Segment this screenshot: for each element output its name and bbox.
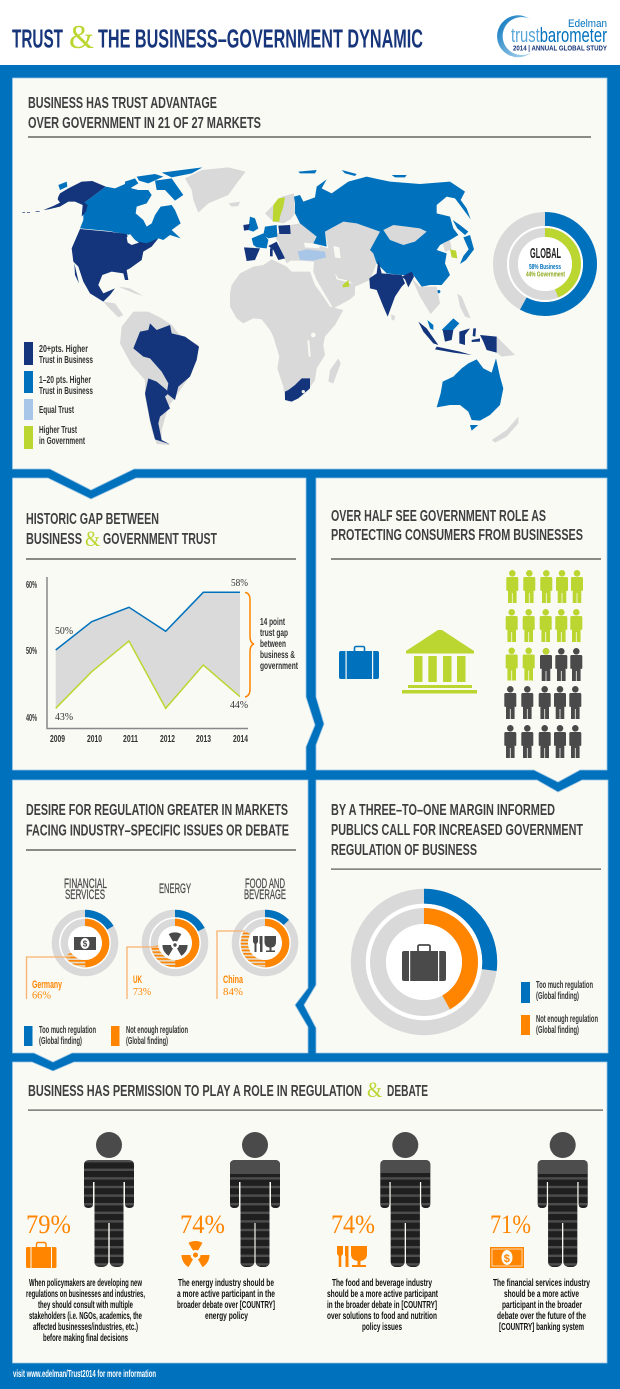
icon: orange fork, knife and glass: [337, 1246, 367, 1267]
area chart: 2009: [50, 733, 65, 745]
area chart: 2012: [160, 733, 175, 745]
area chart: 44%: [230, 700, 248, 711]
icon: orange briefcase: [26, 1242, 56, 1268]
heading: [331, 802, 601, 870]
heading: BUSINESS: [26, 531, 82, 548]
stat: 79% policymakers: When policymakers are developing new: [29, 1277, 142, 1289]
panel: historic gap chart: [12, 478, 315, 770]
icon: orange radiation: [183, 1242, 208, 1268]
footer link text: visit www.edelman/Trust2014 for more information: [13, 1369, 156, 1380]
title: THE BUSINESS–GOVERNMENT DYNAMIC: [98, 24, 423, 54]
heading: BUSINESS HAS PERMISSION TO PLAY A ROLE IN REGULATION: [28, 1083, 362, 1100]
line: government trust: [56, 641, 240, 708]
area chart: [26, 577, 248, 745]
logo: Edelman trustbarometer: [497, 15, 607, 57]
heading: BUSINESS HAS TRUST ADVANTAGE: [28, 95, 217, 112]
heading: REGULATION OF BUSINESS: [331, 842, 477, 859]
legend: regulation: (Global finding): [39, 1035, 82, 1047]
legend: map key: [24, 342, 93, 449]
stat: 74% food and beverage: in the broader debate in [COUNTRY]: [327, 1299, 437, 1311]
area chart: 50%: [55, 626, 73, 637]
donut: financial services: [26, 876, 115, 1002]
heading: &: [367, 1077, 382, 1102]
map: Americas: [22, 167, 246, 445]
stat: 74% energy: The energy industry should be: [178, 1277, 274, 1289]
icon: dark briefcase: [402, 945, 446, 981]
title: [12, 19, 423, 56]
icon: fork, knife and glass: [253, 936, 276, 952]
donut: global trust: 44% Government: [526, 270, 565, 278]
donut: energy: UK: [133, 974, 142, 986]
panel: trust advantage world map: [12, 78, 607, 490]
legend: regulation: (Global finding): [126, 1035, 168, 1047]
legend: map key: Equal Trust: [39, 404, 74, 416]
brace: gap annotation: government: [260, 660, 298, 672]
brace: gap annotation: 14 point: [260, 616, 285, 628]
stat: 74% food and beverage: policy issues: [362, 1321, 402, 1333]
area chart: 2013: [196, 733, 211, 745]
heading: [331, 508, 601, 560]
icon: government building: [402, 630, 477, 694]
donut: global trust: [500, 219, 590, 309]
map: Europe, Africa, Asia, Oceania: [230, 170, 518, 443]
icon: radiation: [164, 934, 186, 956]
legend: map key: 20+pts. Higher: [39, 343, 88, 355]
donut: food and beverage: FOOD AND: [245, 876, 285, 891]
icon: banknote: $: [83, 940, 88, 948]
area chart: 58%: [231, 578, 248, 589]
donut: financial services: SERVICES: [65, 887, 105, 902]
logo: Edelman trustbarometer: Edelman: [568, 18, 607, 30]
brace: gap annotation: trust gap: [260, 627, 288, 639]
stat: 74% energy: 74%: [180, 1210, 225, 1239]
heading: [26, 802, 296, 851]
legend: map key: Trust in Business: [39, 385, 93, 397]
stat: 71% financial services: [490, 1132, 590, 1333]
heading: [28, 1077, 603, 1111]
stat: 74% energy: energy policy: [205, 1310, 248, 1322]
legend: map key: 1–20 pts. Higher: [39, 374, 91, 386]
logo: Edelman trustbarometer: 2014 | ANNUAL GLOBAL STUDY: [513, 46, 607, 52]
icon: orange banknote: [490, 1247, 524, 1268]
legend: regulation global: (Global finding): [536, 990, 579, 1002]
line: business trust: [56, 592, 240, 650]
heading: [26, 511, 296, 560]
heading: DEBATE: [387, 1083, 428, 1100]
stat: 71% financial services: 71%: [490, 1210, 531, 1239]
donut: energy: 73%: [133, 986, 151, 998]
legend: regulation: Too much regulation: [39, 1024, 96, 1036]
panel: desire for regulation: [12, 780, 308, 1062]
stat: 74% energy: broader debate over [COUNTRY]: [177, 1299, 275, 1311]
stat: 79% policymakers: regulations on businesses and industries,: [26, 1288, 145, 1300]
area chart: 50%: [26, 645, 37, 657]
title: TRUST: [12, 24, 63, 54]
heading: GOVERNMENT TRUST: [103, 531, 217, 548]
icon: blue briefcase: [339, 646, 379, 679]
brace: gap annotation: [245, 592, 298, 697]
area chart: 2011: [123, 733, 138, 745]
heading: FACING INDUSTRY–SPECIFIC ISSUES OR DEBATE: [26, 822, 289, 840]
stat: 79% policymakers: before making final decisions: [43, 1332, 128, 1344]
stat: 79% policymakers: they should consult with multiple: [38, 1299, 133, 1311]
stat: 79% policymakers: 79%: [26, 1210, 71, 1239]
heading: OVER GOVERNMENT IN 21 OF 27 MARKETS: [28, 115, 261, 132]
legend: regulation global: [521, 979, 598, 1036]
donut: energy: ENERGY: [159, 881, 191, 896]
stat: 74% energy: [177, 1132, 280, 1322]
heading: DESIRE FOR REGULATION GREATER IN MARKETS: [26, 802, 288, 819]
heading: [28, 95, 591, 138]
donut: global trust: GLOBAL: [530, 246, 561, 262]
donut: global trust: 58% Business: [529, 262, 561, 271]
donut: financial services: Germany: [32, 979, 63, 991]
stat: 74% food and beverage: The food and beverage industry: [332, 1277, 432, 1289]
icon: orange banknote: $: [504, 1253, 510, 1265]
donut: energy: [127, 881, 205, 999]
area chart: 40%: [26, 712, 37, 724]
brace: gap annotation: business &: [260, 649, 295, 661]
stat: 74% food and beverage: over solutions to food and nutrition: [327, 1310, 437, 1322]
pictogram: 25 people: [504, 570, 583, 758]
donut: food and beverage: 84%: [223, 986, 243, 998]
heading: &: [85, 526, 100, 551]
brace: gap annotation: between: [260, 638, 286, 650]
stat: 74% food and beverage: 74%: [331, 1210, 375, 1239]
donut: financial services: 66%: [32, 990, 51, 1002]
title: &: [69, 19, 94, 56]
panel: government role: [316, 478, 607, 782]
donut: informed publics: [358, 896, 490, 1028]
donut: food and beverage: China: [223, 974, 244, 986]
stat: 74% energy: a more active participant in the: [177, 1288, 275, 1300]
legend: map key: in Government: [39, 435, 85, 447]
area chart: 2014: [233, 733, 248, 745]
panel: business permission: [12, 1062, 607, 1363]
legend: map key: Trust in Business: [39, 354, 93, 366]
donut: financial services: FINANCIAL: [64, 876, 107, 891]
area chart: 60%: [26, 579, 37, 591]
donut: food and beverage: [217, 876, 295, 999]
legend: regulation: Not enough regulation: [126, 1024, 188, 1036]
area chart: 2010: [87, 733, 102, 745]
donut: food and beverage: BEVERAGE: [244, 887, 286, 902]
legend: regulation global: (Global finding): [536, 1024, 579, 1036]
heading: HISTORIC GAP BETWEEN: [26, 511, 159, 528]
stat: 79% policymakers: affected businesses/industries, etc.): [33, 1321, 138, 1333]
area chart: 43%: [55, 712, 73, 723]
panel: three-to-one margin: [304, 780, 608, 1053]
stat: 79% policymakers: [26, 1132, 145, 1344]
stat: 79% policymakers: stakeholders (i.e. NGOs, academics, the: [29, 1310, 142, 1322]
world map: [22, 167, 518, 445]
stat: 74% food and beverage: should be a more active participant: [327, 1288, 438, 1300]
legend: map key: Higher Trust: [39, 424, 77, 436]
stat: 74% food and beverage: [327, 1132, 438, 1333]
header band: [0, 0, 620, 65]
legend: regulation: [24, 1024, 188, 1047]
